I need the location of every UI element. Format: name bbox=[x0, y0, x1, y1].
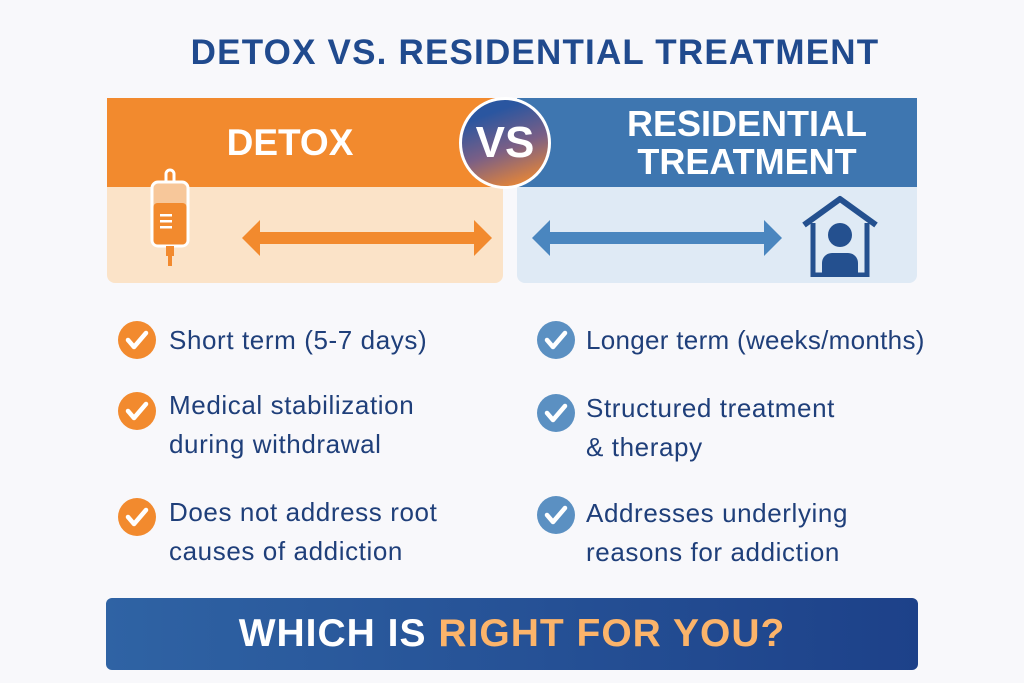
list: residential: Longer term (weeks/months) bbox=[586, 325, 925, 355]
icon: house with person bbox=[802, 196, 878, 277]
banner: which is right bbox=[106, 598, 918, 670]
title: DETOX VS. RESIDENTIAL TREATMENT bbox=[191, 33, 879, 72]
list: detox: Medical stabilization bbox=[169, 390, 414, 420]
arrow: residential bbox=[532, 220, 782, 256]
vs badge: VS bbox=[476, 118, 534, 167]
list: detox: Does not address root bbox=[169, 497, 437, 527]
residential header bbox=[517, 98, 917, 187]
item: underlying bbox=[537, 496, 848, 567]
list: detox bbox=[118, 321, 437, 566]
list: residential bbox=[537, 321, 925, 567]
list: residential: & therapy bbox=[586, 432, 703, 462]
residential header: TREATMENT bbox=[637, 141, 857, 182]
list: detox: Short term (5-7 days) bbox=[169, 325, 427, 355]
panel: detox bbox=[107, 98, 503, 283]
item: longer term bbox=[537, 321, 925, 359]
residential header: RESIDENTIAL bbox=[627, 103, 867, 144]
banner: which is right: WHICH IS RIGHT FOR YOU? bbox=[239, 612, 785, 655]
panel: residential bbox=[517, 98, 917, 283]
vs badge bbox=[459, 97, 551, 189]
item: short term bbox=[118, 321, 427, 359]
detox header: DETOX bbox=[227, 122, 353, 163]
item: root causes bbox=[118, 497, 437, 566]
list: detox: during withdrawal bbox=[169, 429, 382, 459]
item: structured bbox=[537, 393, 835, 462]
list: residential: reasons for addiction bbox=[586, 537, 840, 567]
item: medical bbox=[118, 390, 414, 459]
list: residential: Structured treatment bbox=[586, 393, 835, 423]
icon: iv bag bbox=[150, 168, 190, 266]
list: residential: Addresses underlying bbox=[586, 498, 848, 528]
detox header bbox=[107, 98, 503, 187]
arrow: detox bbox=[242, 220, 492, 256]
list: detox: causes of addiction bbox=[169, 536, 403, 566]
